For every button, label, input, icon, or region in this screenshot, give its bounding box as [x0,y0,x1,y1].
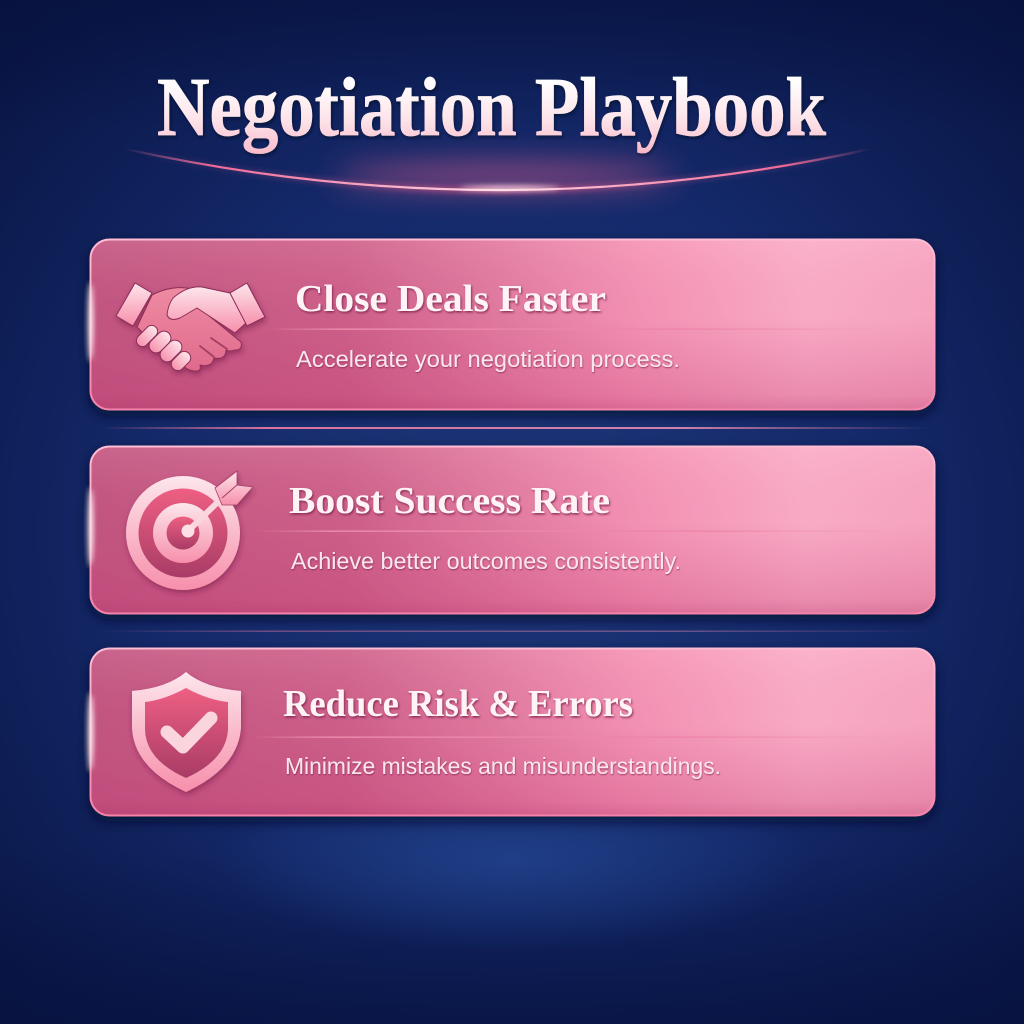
description: Accelerate your negotiation process. [296,346,680,372]
icon: target with arrow [126,471,253,590]
description: Minimize mistakes and misunderstandings. [285,753,721,779]
heading: Boost Success Rate [289,480,610,522]
divider [255,530,895,532]
icon: handshake [116,283,265,373]
title: Negotiation Playbook [157,61,826,154]
card background [88,240,934,410]
separator lines [100,427,930,632]
divider [265,328,885,330]
icon: shield with check [132,672,241,792]
panel: reduce risk and errors [88,648,934,816]
card background [88,446,934,614]
divider [250,736,890,738]
panel: boost success rate [88,446,934,614]
card background [88,648,934,816]
heading: Reduce Risk & Errors [283,683,633,725]
description: Achieve better outcomes consistently. [291,548,681,574]
panel: close deals faster [88,240,934,410]
title arc underline [125,149,870,190]
heading: Close Deals Faster [295,278,606,320]
